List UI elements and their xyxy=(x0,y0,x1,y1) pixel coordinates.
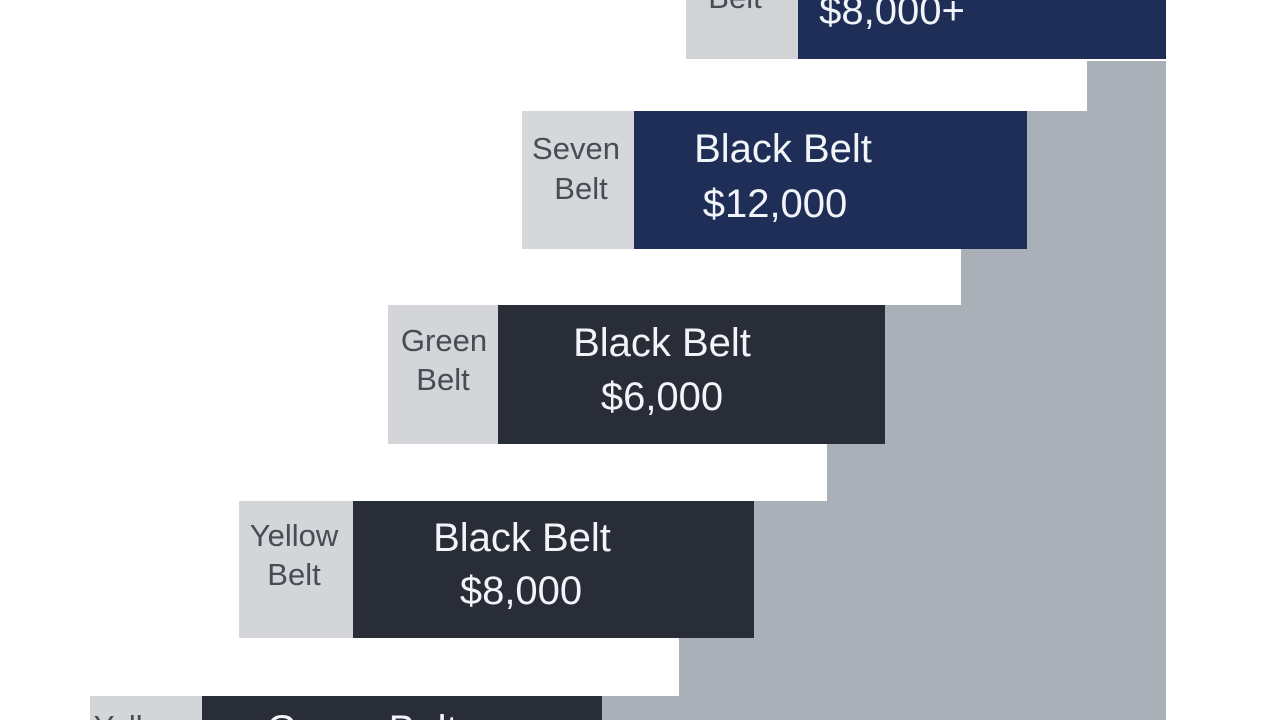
step: Green Belt to Black Belt, $6,000: Black Belt xyxy=(573,321,751,365)
step: Green Belt to Black Belt, $6,000: Belt xyxy=(416,362,470,397)
step: Seven Belt to Black Belt, $12,000: Belt xyxy=(554,171,608,206)
step: Green Belt to Black Belt, $6,000: Green xyxy=(401,323,487,358)
step: Yellow Belt to Black Belt, $8,000: Belt xyxy=(267,557,321,592)
step: Yellow Belt to Black Belt, $8,000 xyxy=(239,501,754,638)
step: Yellow Belt to Black Belt, $8,000: Black Belt xyxy=(433,516,611,560)
step: Seven Belt to Black Belt, $12,000: Black Belt xyxy=(694,127,872,171)
step: Yellow Belt to Black Belt, $8,000: Yellow xyxy=(250,518,339,553)
step: Yellow Belt to Green Belt, bottom tier xyxy=(90,696,602,720)
step: Seven Belt to Black Belt, $12,000: $12,000 xyxy=(703,182,847,226)
staircase background xyxy=(602,61,1166,720)
step: Yellow Belt to Black Belt, $8,000: $8,000 xyxy=(460,569,582,613)
step: Seven Belt to Black Belt, $12,000: Seven xyxy=(532,131,620,166)
step: Green Belt to Black Belt, $6,000 xyxy=(388,305,885,444)
step: Seven Belt to Black Belt, $12,000 xyxy=(522,111,1027,249)
step: Green Belt to Black Belt, $6,000: $6,000 xyxy=(601,375,723,419)
step: top tier, $8,000+ xyxy=(686,0,1166,59)
